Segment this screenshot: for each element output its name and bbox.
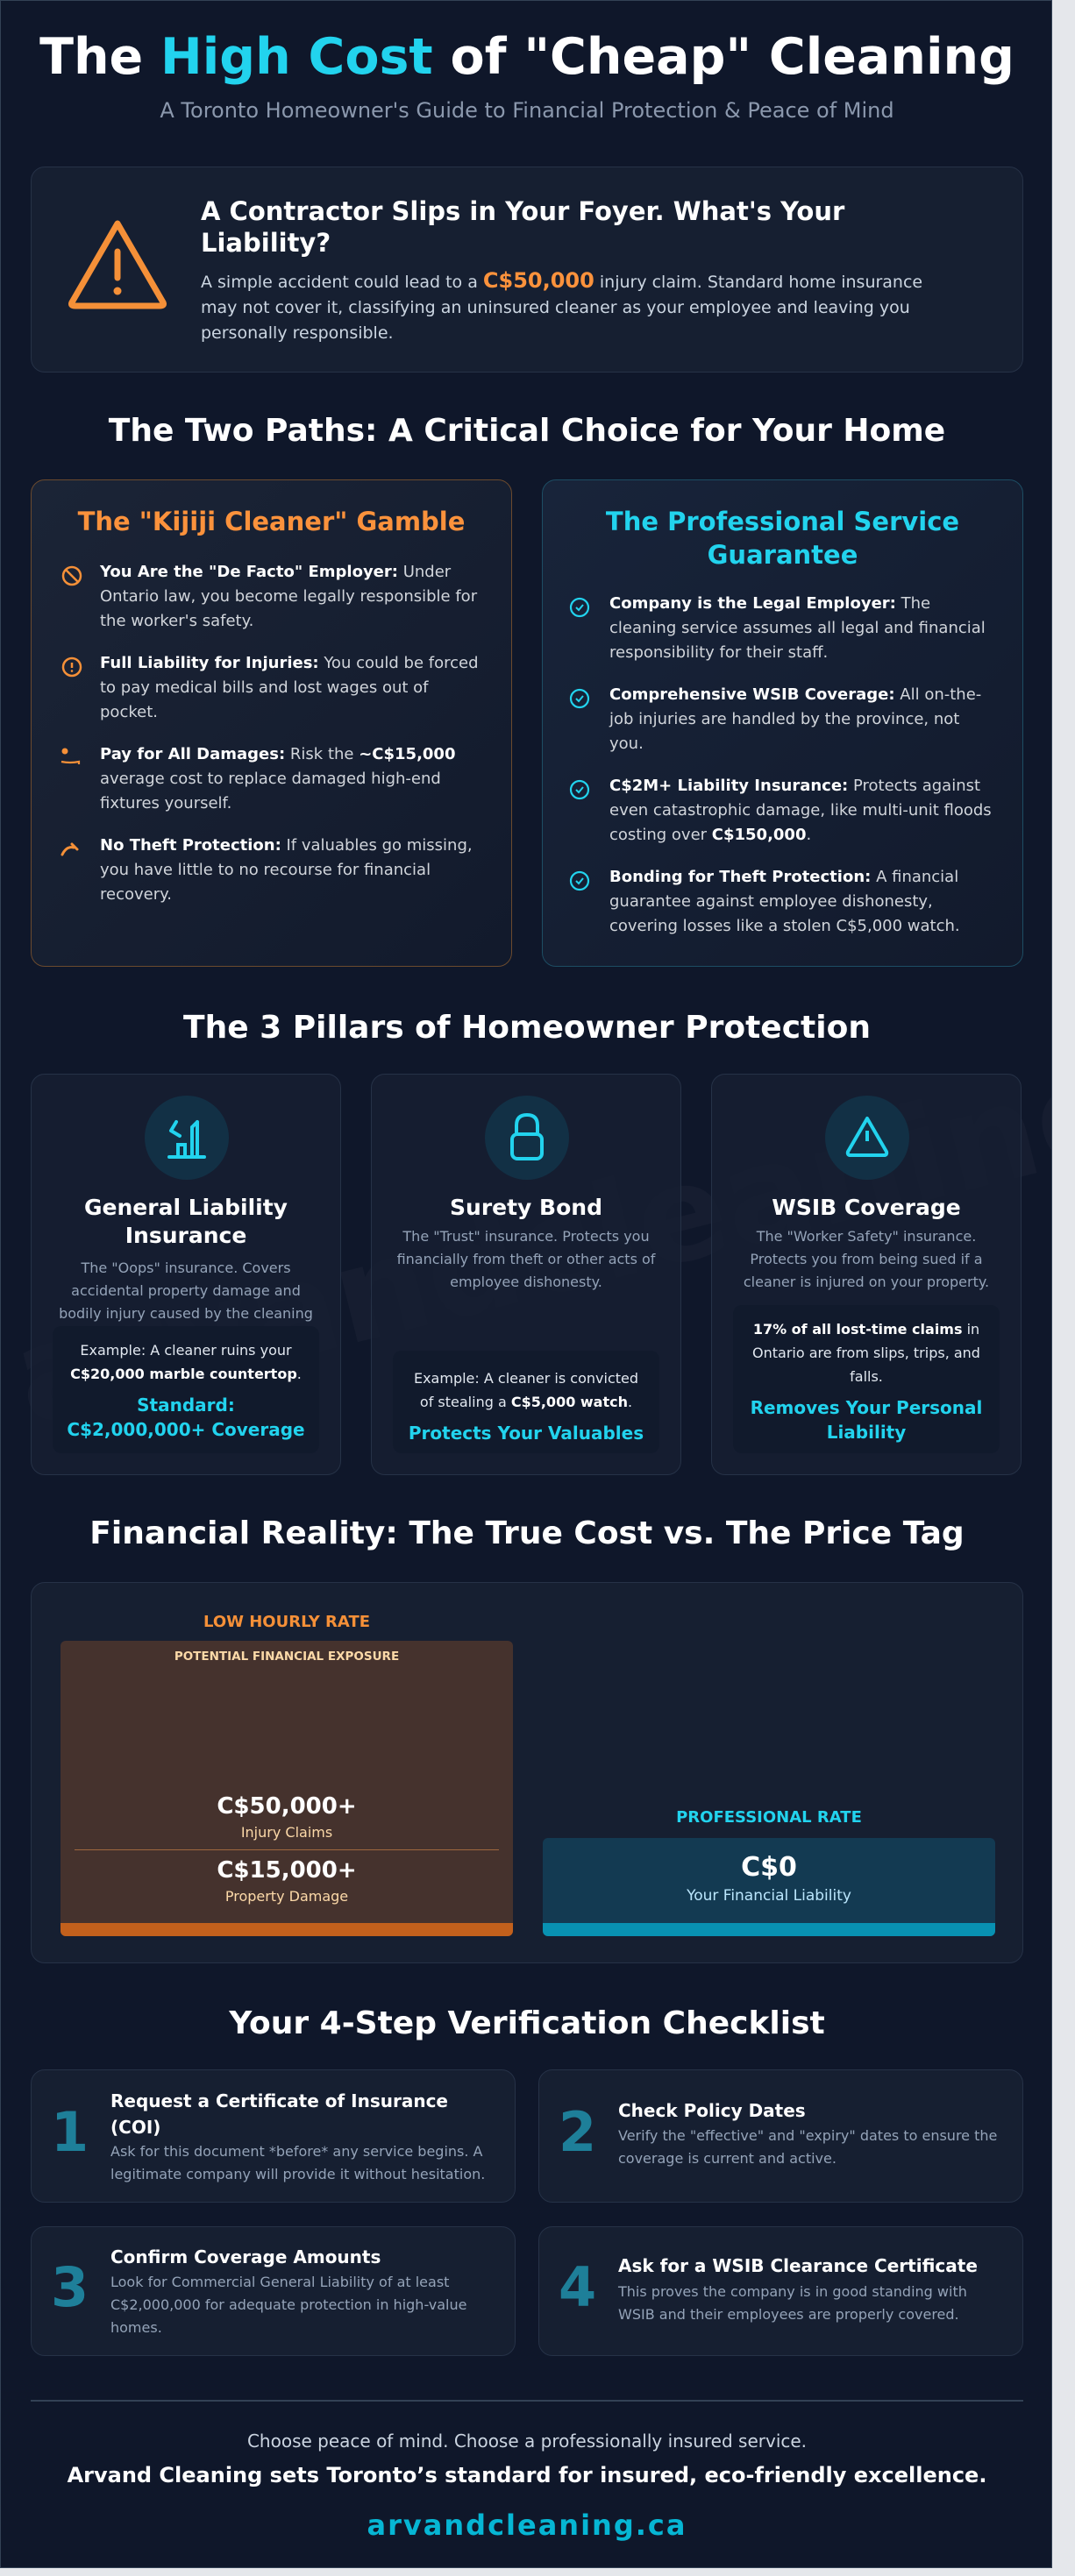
alert card: [31, 167, 1023, 373]
bar: professional: Your Financial Liability: [687, 1887, 851, 1905]
pillar description: The "Trust" insurance. Protects you financially from theft or other acts of employee dishonesty.: [397, 1228, 655, 1290]
example box: [393, 1351, 659, 1453]
heading: financial reality: Financial Reality: The True Cost vs. The Price Tag: [89, 1515, 965, 1551]
heading: checklist: Your 4-Step Verification Checklist: [229, 2005, 825, 2041]
step 4: [538, 2226, 1023, 2356]
panel: kijiji gamble: [31, 479, 512, 967]
subtitle: A Toronto Homeowner's Guide to Financial Protection & Peace of Mind: [160, 98, 894, 123]
icon: lock: [485, 1096, 569, 1180]
icon: chart: [145, 1096, 229, 1180]
bar: low rate exposure: POTENTIAL FINANCIAL EXPOSURE: [174, 1650, 399, 1664]
bar: low rate exposure: C$15,000+: [217, 1857, 357, 1884]
chart: cost comparison: [31, 1582, 1023, 1963]
step 2: Check Policy Dates: [618, 2100, 806, 2121]
item 4: No Theft Protection: If valuables go missing, you have little to no recourse for financial recovery.: [100, 836, 473, 904]
heading: 3 pillars: The 3 Pillars of Homeowner Protection: [183, 1010, 871, 1046]
pillar: general liability: [31, 1074, 341, 1475]
example box: Example: A cleaner is convicted: [414, 1370, 638, 1387]
example box: [53, 1326, 319, 1453]
step 3: Look for Commercial General Liability of at least C$2,000,000 for adequate protection in high-value homes.: [110, 2274, 466, 2336]
step 3: [31, 2226, 516, 2356]
item 1: Company is the Legal Employer: The cleaning service assumes all legal and financial responsibility for their staff.: [609, 594, 986, 662]
step 2: [538, 2069, 1023, 2203]
pillar title: WSIB Coverage: [772, 1195, 961, 1220]
footer text: Choose peace of mind. Choose a professionally insured service.: [247, 2431, 807, 2452]
step 2: Verify the "effective" and "expiry" dates to ensure the coverage is current and active.: [618, 2127, 997, 2167]
alert heading: A Contractor Slips in Your Foyer. What's Your Liability?: [201, 196, 844, 258]
item 3: Pay for All Damages: Risk the ~C$15,000 average cost to replace damaged high-end fixtures yourself.: [100, 745, 455, 813]
footer tagline: Arvand Cleaning sets Toronto’s standard for insured, eco-friendly excellence.: [68, 2463, 986, 2487]
pillar title: [84, 1195, 288, 1248]
pillar description: The "Worker Safety" insurance. Protects you from being sued if a cleaner is injured on your property.: [744, 1228, 989, 1290]
panel title: The "Kijiji Cleaner" Gamble: [78, 507, 465, 536]
item 2: Comprehensive WSIB Coverage: All on-the-job injuries are handled by the province, not you.: [609, 685, 981, 753]
step 2: 2: [559, 2100, 596, 2164]
panel: professional guarantee: [542, 479, 1023, 967]
pillar: surety bond: [371, 1074, 681, 1475]
alert text: A simple accident could lead to a C$50,000 injury claim. Standard home insurance may not cover it, classifying an uninsured cleaner as your employee and leaving you personally responsible.: [201, 268, 922, 343]
step 1: [31, 2069, 516, 2203]
bar: low rate exposure: [61, 1641, 513, 1936]
panel title: The Professional Service Guarantee: [606, 507, 959, 570]
icon: warning: [825, 1096, 909, 1180]
bar label: low: LOW HOURLY RATE: [203, 1613, 370, 1631]
bar: professional: C$0: [741, 1852, 797, 1883]
example box: Example: A cleaner ruins your: [80, 1342, 292, 1359]
step 1: 1: [51, 2100, 89, 2164]
footer url: arvandcleaning.ca: [367, 2509, 687, 2542]
bar label: professional: PROFESSIONAL RATE: [676, 1808, 862, 1827]
bar: low rate exposure: Injury Claims: [241, 1824, 332, 1841]
item 2: Full Liability for Injuries: You could be forced to pay medical bills and lost wages out of pocket.: [100, 654, 479, 721]
example box: Protects Your Valuables: [409, 1423, 644, 1444]
stat box: Removes Your Personal: [751, 1397, 982, 1418]
example box: C$2,000,000+ Coverage: [67, 1419, 305, 1440]
stat box: 17% of all lost-time claims in Ontario are from slips, trips, and falls.: [752, 1321, 980, 1385]
pillar title: General Liability: [84, 1195, 288, 1220]
bar: low rate exposure: C$50,000+: [217, 1793, 357, 1820]
bar: low rate exposure: Property Damage: [225, 1888, 348, 1905]
step 4: This proves the company is in good standing with WSIB and their employees are properly covered.: [618, 2283, 967, 2323]
pillar title: Insurance: [125, 1223, 246, 1248]
item 1: You Are the "De Facto" Employer: Under Ontario law, you become legally responsible for the worker's safety.: [100, 563, 477, 630]
bar: professional: [543, 1838, 995, 1936]
pillar: wsib: [711, 1074, 1022, 1475]
step 3: Confirm Coverage Amounts: [110, 2246, 381, 2267]
pillar description: The "Oops" insurance. Covers accidental property damage and bodily injury caused by the cleaning team.: [59, 1260, 313, 1345]
example box: of stealing a C$5,000 watch.: [420, 1394, 632, 1410]
icon: warning triangle: [68, 221, 167, 309]
step 4: Ask for a WSIB Clearance Certificate: [618, 2255, 978, 2276]
example box: C$20,000 marble countertop.: [70, 1366, 302, 1382]
example box: Standard:: [137, 1394, 235, 1416]
item 3: C$2M+ Liability Insurance: Protects against even catastrophic damage, like multi-unit floods costing over C$150,000.: [609, 777, 992, 844]
title: The High Cost of "Cheap" Cleaning: [39, 28, 1014, 86]
stat box: [733, 1305, 1000, 1453]
step 4: 4: [559, 2255, 596, 2319]
item 4: Bonding for Theft Protection: A financial guarantee against employee dishonesty, covering losses like a stolen C$5,000 watch.: [609, 868, 960, 935]
step 1: Request a Certificate of Insurance (COI): [110, 2090, 448, 2138]
step 3: 3: [51, 2255, 89, 2319]
stat box: Liability: [827, 1422, 906, 1443]
step 1: Ask for this document *before* any service begins. A legitimate company will provide it without hesitation.: [110, 2143, 485, 2182]
pillar title: Surety Bond: [450, 1195, 602, 1220]
heading: two paths: The Two Paths: A Critical Choice for Your Home: [109, 413, 945, 449]
